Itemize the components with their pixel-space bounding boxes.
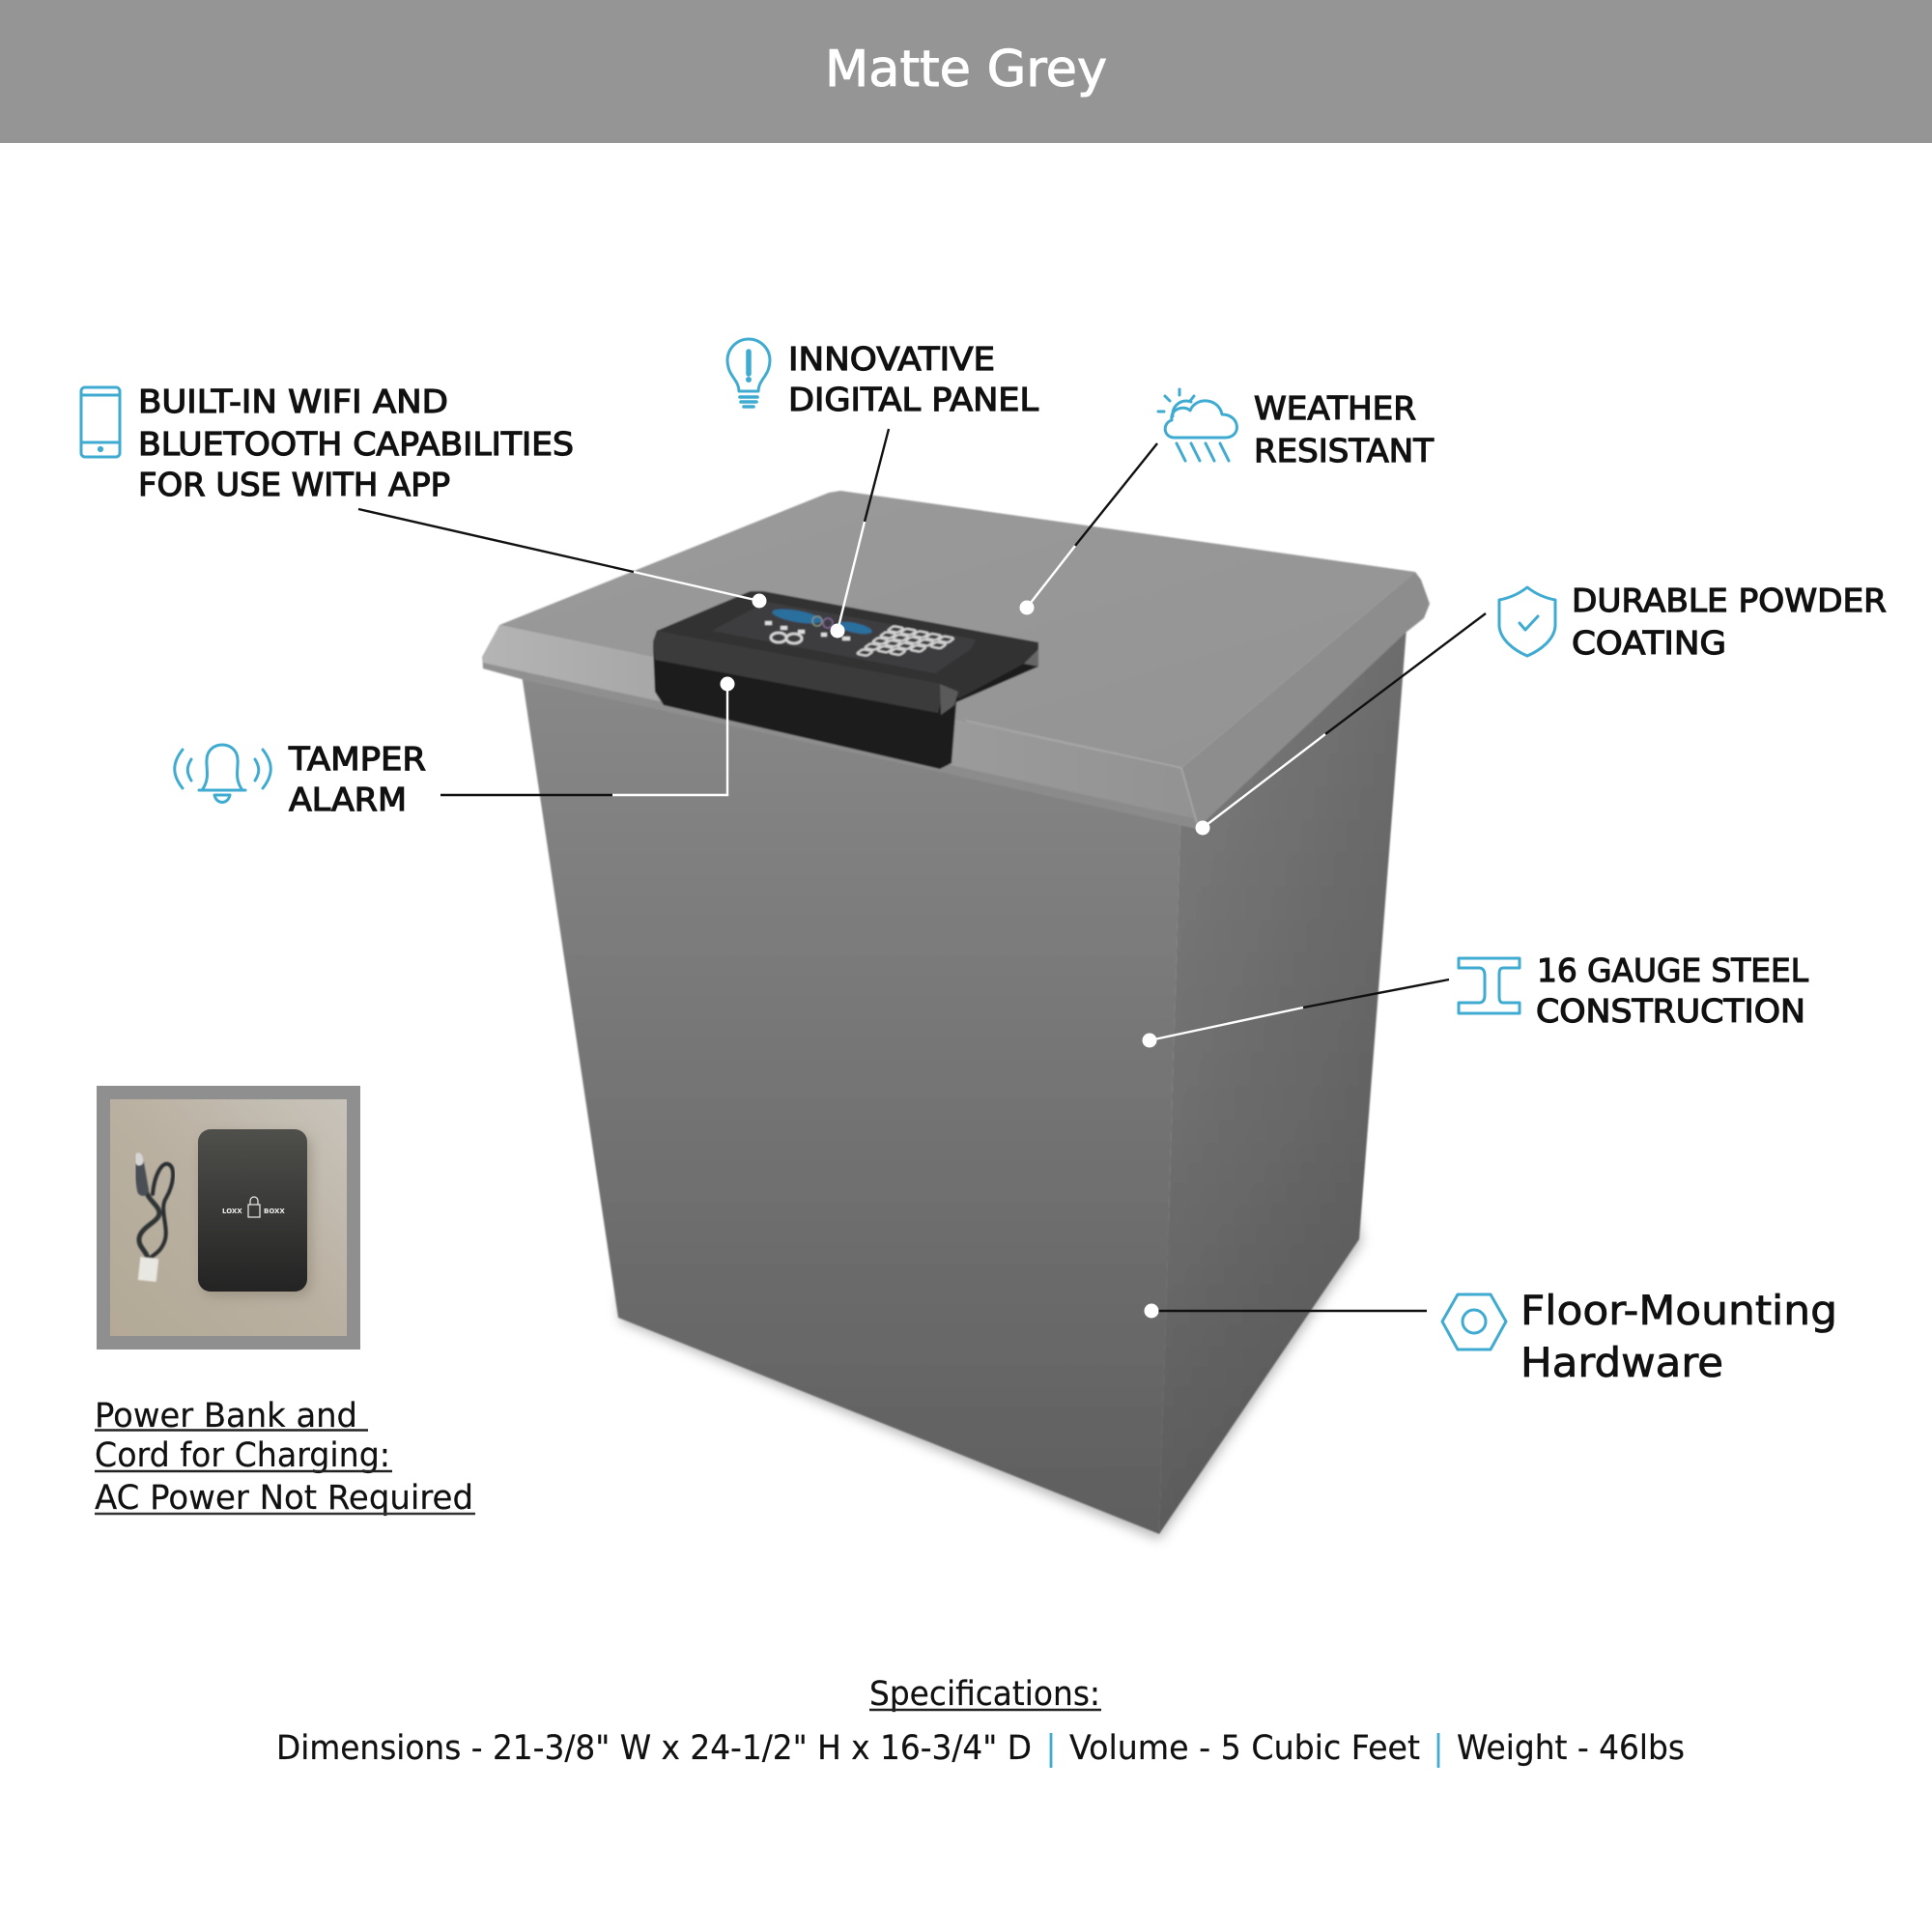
product: grey parcel box xyxy=(482,491,1430,1540)
lid top face xyxy=(499,491,1415,768)
housing corner xyxy=(940,684,958,715)
text: wifi and bluetooth: FOR USE WITH APP xyxy=(138,466,450,503)
two lobed button xyxy=(771,633,802,643)
leader: tamper xyxy=(440,676,734,795)
text: tamper alarm xyxy=(288,740,426,818)
weight: Weight - 46lbs xyxy=(1457,1729,1685,1768)
power bank xyxy=(198,1129,307,1292)
text: wifi and bluetooth xyxy=(138,383,574,503)
callout: 16 gauge steel xyxy=(1142,952,1809,1047)
lid right bevel xyxy=(1181,572,1430,829)
text: durable powder coating: DURABLE POWDER xyxy=(1572,582,1887,619)
usb cord xyxy=(138,1157,173,1282)
icon: hex nut xyxy=(1442,1294,1506,1350)
housing underside slot xyxy=(1024,649,1038,667)
right face shade xyxy=(1159,628,1406,1534)
leader: steel xyxy=(1142,980,1449,1047)
caption: power bank xyxy=(95,1397,475,1518)
callout: weather resistant xyxy=(1020,389,1435,614)
callout: durable powder coating xyxy=(1196,582,1887,835)
dimensions: Dimensions - 21-3/8" W x 24-1/2" H x 16-3/4" D xyxy=(276,1729,1032,1768)
status indicators xyxy=(765,621,850,640)
leader: weather xyxy=(1020,443,1157,614)
text: weather resistant: WEATHER xyxy=(1254,389,1416,427)
photo: power bank and cord xyxy=(97,1086,360,1350)
power bank logo: LOXX xyxy=(222,1208,242,1215)
lid ridge highlight xyxy=(966,721,1197,823)
callout: tamper alarm xyxy=(175,676,734,818)
text: 16 gauge steel: 16 GAUGE STEEL xyxy=(1537,952,1809,989)
photo frame xyxy=(97,1086,360,1350)
ground shadow xyxy=(618,1198,1362,1540)
title: Matte Grey xyxy=(825,41,1107,99)
text: tamper alarm: ALARM xyxy=(289,781,407,818)
text: tamper alarm: TAMPER xyxy=(288,740,426,778)
text: wifi and bluetooth: BUILT-IN WIFI AND xyxy=(138,383,448,420)
specifications xyxy=(276,1675,1685,1768)
housing front band xyxy=(653,631,942,713)
text: weather resistant xyxy=(1254,389,1435,469)
icon: shield with check xyxy=(1499,587,1555,656)
power bank logo: BOXX xyxy=(264,1208,285,1215)
volume: Volume - 5 Cubic Feet xyxy=(1069,1729,1420,1768)
icon: ringing bell xyxy=(175,745,270,802)
specifications heading: Specifications: xyxy=(869,1675,1100,1714)
display screen xyxy=(712,602,976,673)
text: innovative digital panel: INNOVATIVE xyxy=(788,340,995,378)
caption: power bank: AC Power Not Required xyxy=(95,1479,473,1518)
header band xyxy=(0,0,1932,143)
separator xyxy=(1050,1733,1052,1768)
text: wifi and bluetooth: BLUETOOTH CAPABILITIES xyxy=(138,425,574,463)
text: weather resistant: RESISTANT xyxy=(1254,432,1435,469)
leader: floor mounting xyxy=(1144,1304,1427,1318)
power bank shadow xyxy=(201,1134,311,1296)
icon: sun cloud and rain xyxy=(1158,389,1236,461)
leader: wifi xyxy=(358,509,767,609)
caption: power bank: Cord for Charging: xyxy=(95,1436,390,1475)
housing silhouette xyxy=(653,591,1038,769)
leader: powder coating xyxy=(1196,613,1486,835)
lid lower lip xyxy=(483,663,1197,829)
text: innovative digital panel: DIGITAL PANEL xyxy=(788,381,1039,418)
text: 16 gauge steel xyxy=(1536,952,1809,1030)
icon: light bulb xyxy=(727,339,770,407)
callout: innovative digital panel xyxy=(727,339,1039,638)
text: floor mounting hardware xyxy=(1520,1287,1837,1386)
keypad xyxy=(857,626,954,666)
power bank logo xyxy=(222,1197,285,1217)
round status rings xyxy=(812,616,833,628)
lid front bevel xyxy=(482,625,1197,829)
callout: floor mounting hardware xyxy=(1144,1287,1837,1386)
blue indicator arcs xyxy=(771,607,873,637)
text: 16 gauge steel: CONSTRUCTION xyxy=(1536,992,1805,1030)
housing top surface xyxy=(653,591,1038,698)
box right face xyxy=(1159,628,1406,1534)
text: durable powder coating: COATING xyxy=(1572,624,1726,662)
text: innovative digital panel xyxy=(788,340,1039,418)
text: floor mounting hardware: Hardware xyxy=(1520,1339,1723,1386)
box front face xyxy=(522,674,1180,1534)
text: durable powder coating xyxy=(1572,582,1887,662)
icon: steel I-beam xyxy=(1459,958,1520,1013)
icon: smartphone xyxy=(81,387,120,457)
leader: digital panel xyxy=(831,429,889,638)
callout: wifi and bluetooth xyxy=(81,383,767,609)
digital panel housing xyxy=(653,591,1038,769)
separator xyxy=(1437,1733,1439,1768)
text: floor mounting hardware: Floor-Mounting xyxy=(1520,1287,1837,1334)
photo background xyxy=(110,1099,347,1336)
caption: power bank: Power Bank and xyxy=(95,1397,357,1435)
